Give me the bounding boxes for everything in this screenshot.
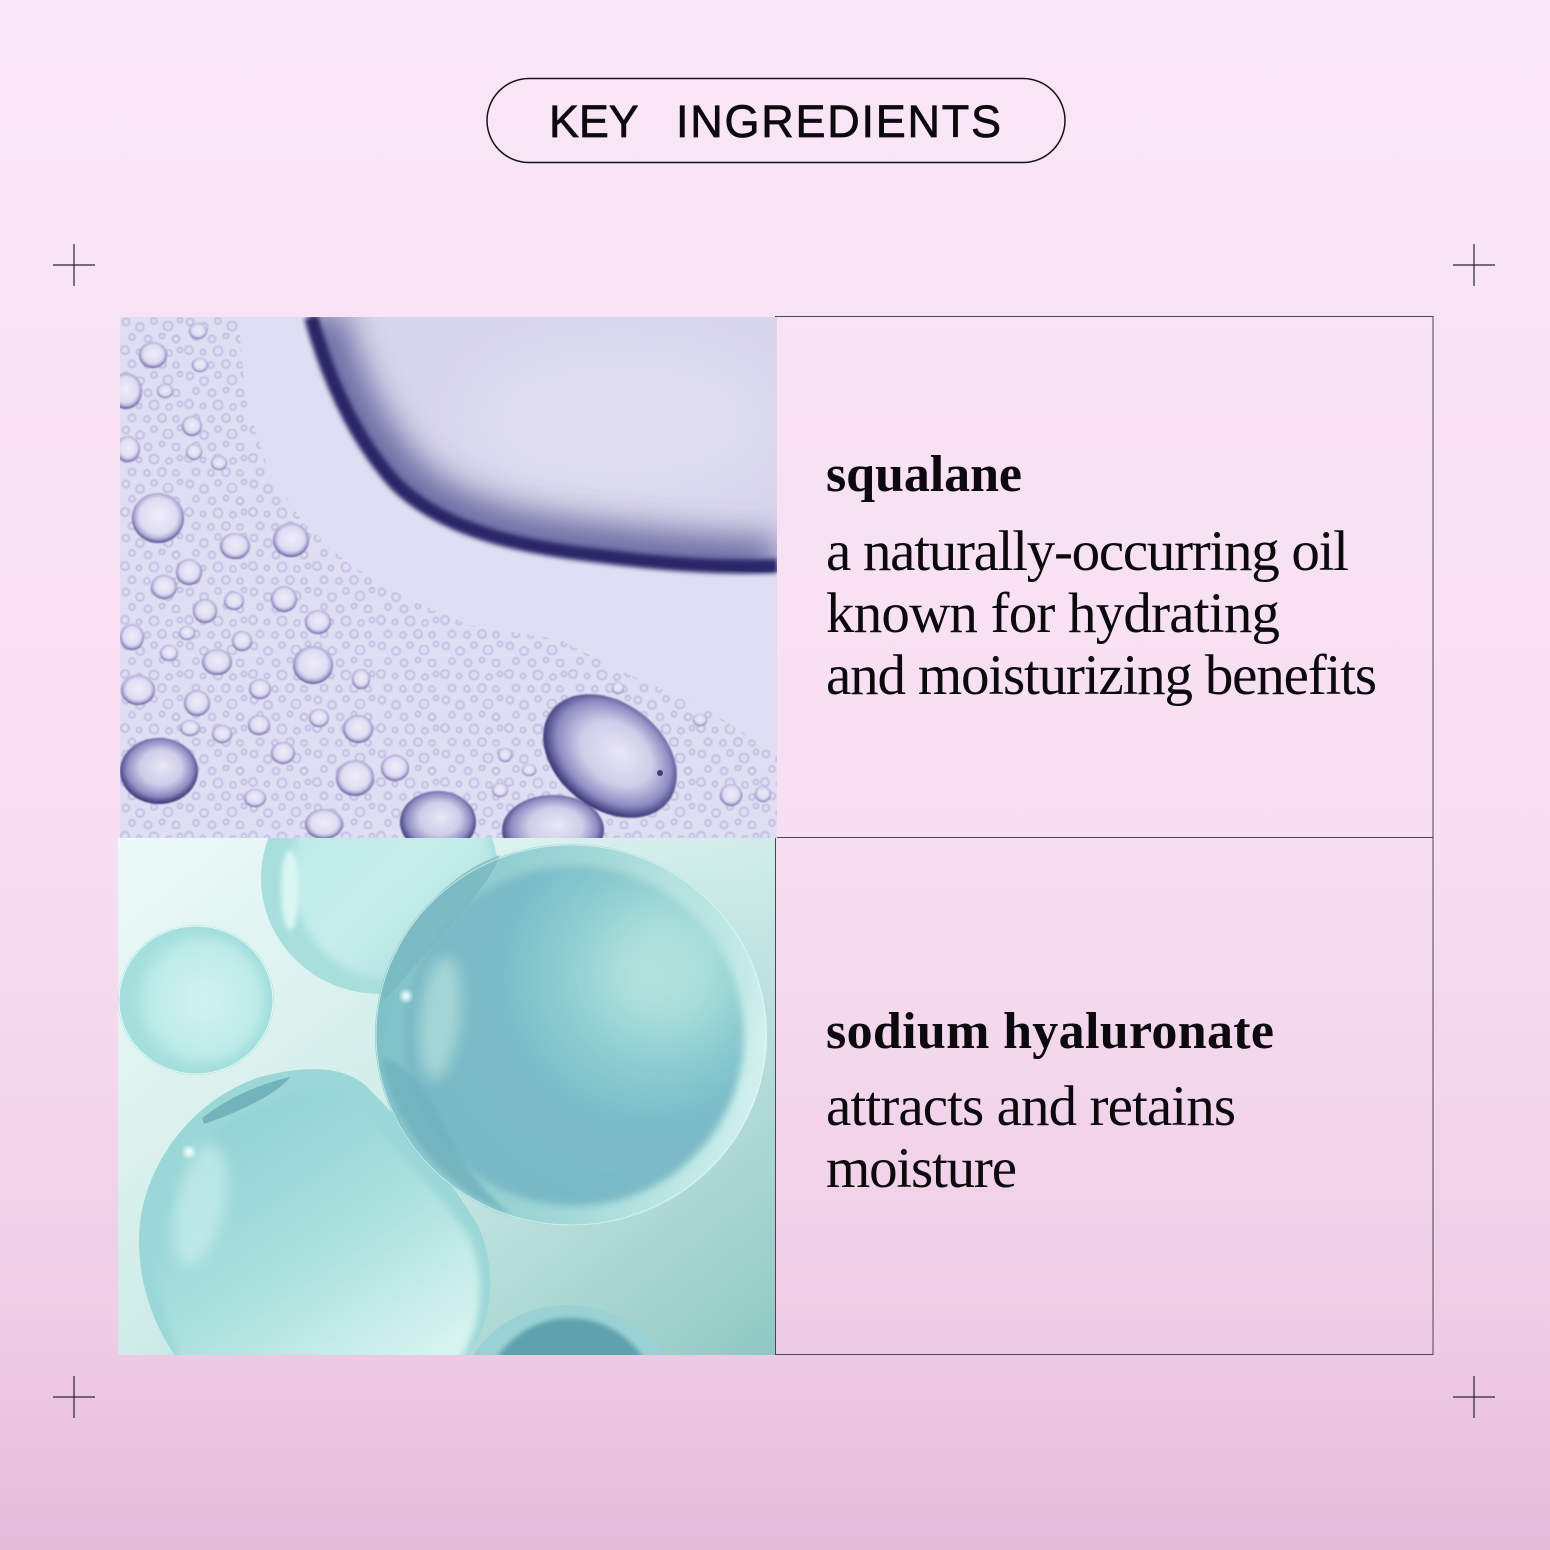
heading: squalane: squalane xyxy=(826,446,1022,503)
field of tiny droplets xyxy=(120,317,777,838)
medium and large droplets xyxy=(110,323,771,839)
description: sodium hyaluronate: moisture xyxy=(826,1137,1017,1200)
description: sodium hyaluronate: attracts and retains xyxy=(826,1075,1236,1138)
big right bubble xyxy=(375,844,767,1226)
description: squalane: and moisturizing benefits xyxy=(826,644,1377,707)
large egg-shaped droplet xyxy=(542,693,678,819)
oil blob with dark edge xyxy=(309,317,777,572)
top bubble xyxy=(261,838,497,994)
title pill: key ingredients: INGREDIENTS xyxy=(676,96,1001,147)
title pill: key ingredients xyxy=(487,78,1065,162)
small left bubble xyxy=(118,925,274,1075)
ingredient: sodium hyaluronate xyxy=(826,1003,1274,1200)
title pill: key ingredients: KEY xyxy=(549,96,639,147)
large droplets along the bottom xyxy=(120,737,605,838)
corner crosshair marks xyxy=(53,244,1495,1418)
image panel: sodium hyaluronate bubbles xyxy=(118,838,775,1355)
description: squalane: known for hydrating xyxy=(826,582,1280,645)
lower left bubble xyxy=(139,1069,490,1360)
table grid frame xyxy=(775,316,1433,1354)
description: squalane: a naturally-occurring oil xyxy=(826,520,1349,583)
heading: sodium hyaluronate: sodium hyaluronate xyxy=(826,1003,1274,1060)
ingredient: squalane xyxy=(826,446,1377,707)
bottom bubble xyxy=(474,1305,662,1355)
image panel: squalane oil droplets xyxy=(110,317,777,865)
